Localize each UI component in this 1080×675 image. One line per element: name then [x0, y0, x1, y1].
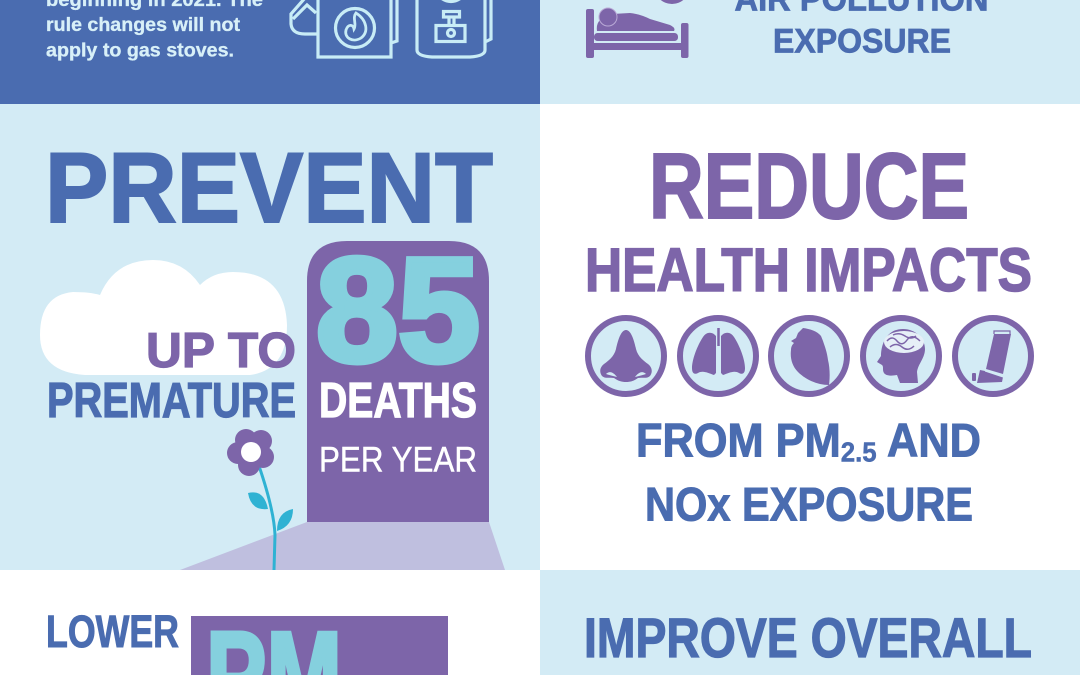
ground: [180, 522, 505, 570]
text: from pm2.5 and nox exposure: FROM PM: [636, 414, 858, 466]
text: deaths per year: DEATHS: [319, 374, 477, 428]
icon: flower: [227, 429, 293, 570]
panel: lower pm: [0, 570, 540, 675]
heading: reduce: REDUCE: [649, 134, 969, 238]
icon: head with brain: [863, 318, 939, 394]
icon: nose: [588, 318, 664, 394]
text: rule changes: rule changes will not: [46, 15, 241, 36]
icon: gas furnace and water heater: [291, 0, 491, 57]
text: from pm2.5 and nox exposure: NOx EXPOSURE: [645, 478, 973, 530]
text: rule changes: apply to gas stoves.: [46, 40, 234, 62]
heading: air pollution exposure: EXPOSURE: [773, 22, 951, 60]
icon: person in bed: [586, 0, 690, 58]
text: from pm2.5 and nox exposure: 2.5: [841, 436, 877, 468]
panel: gas appliance rule: [0, 0, 540, 104]
text: from pm2.5 and nox exposure: [636, 414, 981, 530]
text: up to premature: PREMATURE: [47, 374, 296, 428]
panel: air pollution exposure: [540, 0, 1080, 104]
heading: prevent: PREVENT: [45, 132, 493, 243]
text: deaths per year: [319, 374, 477, 480]
heading: air pollution exposure: [734, 0, 988, 60]
number: 85: 85: [316, 228, 480, 393]
text: deaths per year: PER YEAR: [319, 440, 477, 480]
panel: improve overall: [540, 570, 1080, 675]
text: rule changes: [46, 0, 263, 62]
text: up to premature: UP TO: [146, 324, 296, 378]
icon: inhaler: [955, 318, 1031, 394]
panel: prevent premature deaths: [0, 104, 540, 570]
text: lower: LOWER: [46, 606, 179, 657]
text: up to premature: [47, 324, 296, 428]
icon: cloud: [40, 260, 287, 375]
gravestone: [307, 241, 489, 522]
text: from pm2.5 and nox exposure: AND: [877, 414, 981, 466]
panel: reduce health impacts: [540, 104, 1080, 570]
icon: lungs: [680, 318, 756, 394]
icon: heart: [771, 318, 847, 394]
